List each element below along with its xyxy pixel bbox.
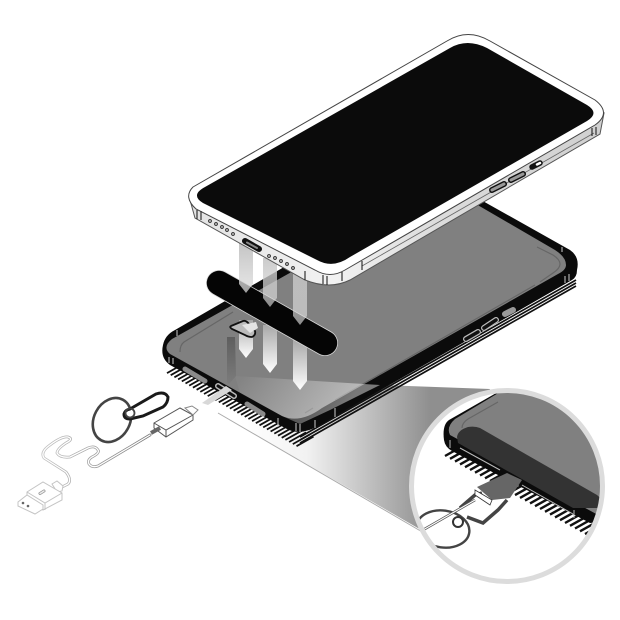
lens hatching bbox=[444, 450, 592, 536]
side buttons bbox=[466, 310, 513, 339]
bottom speaker cutout right bbox=[247, 404, 263, 414]
lens panel inset line bbox=[462, 402, 498, 428]
top phone bbox=[189, 34, 604, 285]
hatched shadow bbox=[167, 364, 314, 446]
side seam line bbox=[362, 133, 594, 266]
strap tab bbox=[230, 321, 258, 337]
lower arrow 2 bbox=[263, 325, 277, 373]
adhesive strap bbox=[219, 283, 325, 343]
lens ledge highlights bbox=[450, 440, 574, 518]
charging port bbox=[245, 241, 259, 249]
magnifier lens bbox=[412, 380, 620, 582]
cone edge line bbox=[218, 413, 424, 533]
usb plug bbox=[18, 481, 63, 514]
lens phone body bbox=[444, 393, 596, 523]
bottom port cutout bbox=[218, 386, 234, 396]
upper arrow 2 bbox=[263, 258, 277, 307]
magnifier cone bbox=[218, 385, 490, 535]
speaker holes bbox=[209, 220, 294, 269]
lens cable bbox=[423, 500, 475, 530]
back phone bbox=[162, 177, 578, 432]
lightning connector bbox=[154, 406, 198, 437]
vertical shadow band bbox=[227, 337, 236, 384]
lower arrow 1 bbox=[239, 320, 253, 358]
lens strap bbox=[457, 427, 601, 508]
upper arrow 1 bbox=[239, 243, 253, 293]
lower arrow 3 bbox=[293, 340, 307, 390]
cable strain relief bbox=[151, 428, 160, 433]
bottom speaker cutout left bbox=[185, 369, 205, 381]
lens split ring bbox=[419, 509, 471, 549]
carabiner clip bbox=[124, 393, 168, 419]
back phone gray panel bbox=[166, 186, 566, 419]
back phone black body bbox=[162, 177, 578, 432]
top phone side wall bbox=[190, 113, 604, 285]
top phone front face bbox=[189, 34, 604, 274]
panel inset lines bbox=[180, 247, 560, 413]
split ring bbox=[85, 391, 139, 449]
antenna bands bbox=[169, 247, 569, 432]
side buttons bbox=[492, 163, 540, 190]
lens rim bbox=[412, 390, 602, 582]
upper arrow 3 bbox=[293, 272, 307, 325]
lens phone panel bbox=[448, 393, 600, 514]
striped shadow lines bbox=[300, 280, 576, 443]
cone light overlay bbox=[235, 376, 380, 424]
antenna bands bbox=[197, 127, 596, 285]
lens link ring bbox=[453, 517, 463, 527]
port pointer arrow bbox=[202, 386, 232, 405]
top phone screen bbox=[197, 43, 593, 264]
lens background bbox=[412, 391, 602, 581]
small link ring bbox=[126, 408, 134, 418]
lens connector bbox=[475, 473, 522, 505]
usb cable bbox=[43, 435, 150, 487]
lens carabiner bbox=[460, 493, 507, 523]
lens contents bbox=[419, 393, 600, 549]
